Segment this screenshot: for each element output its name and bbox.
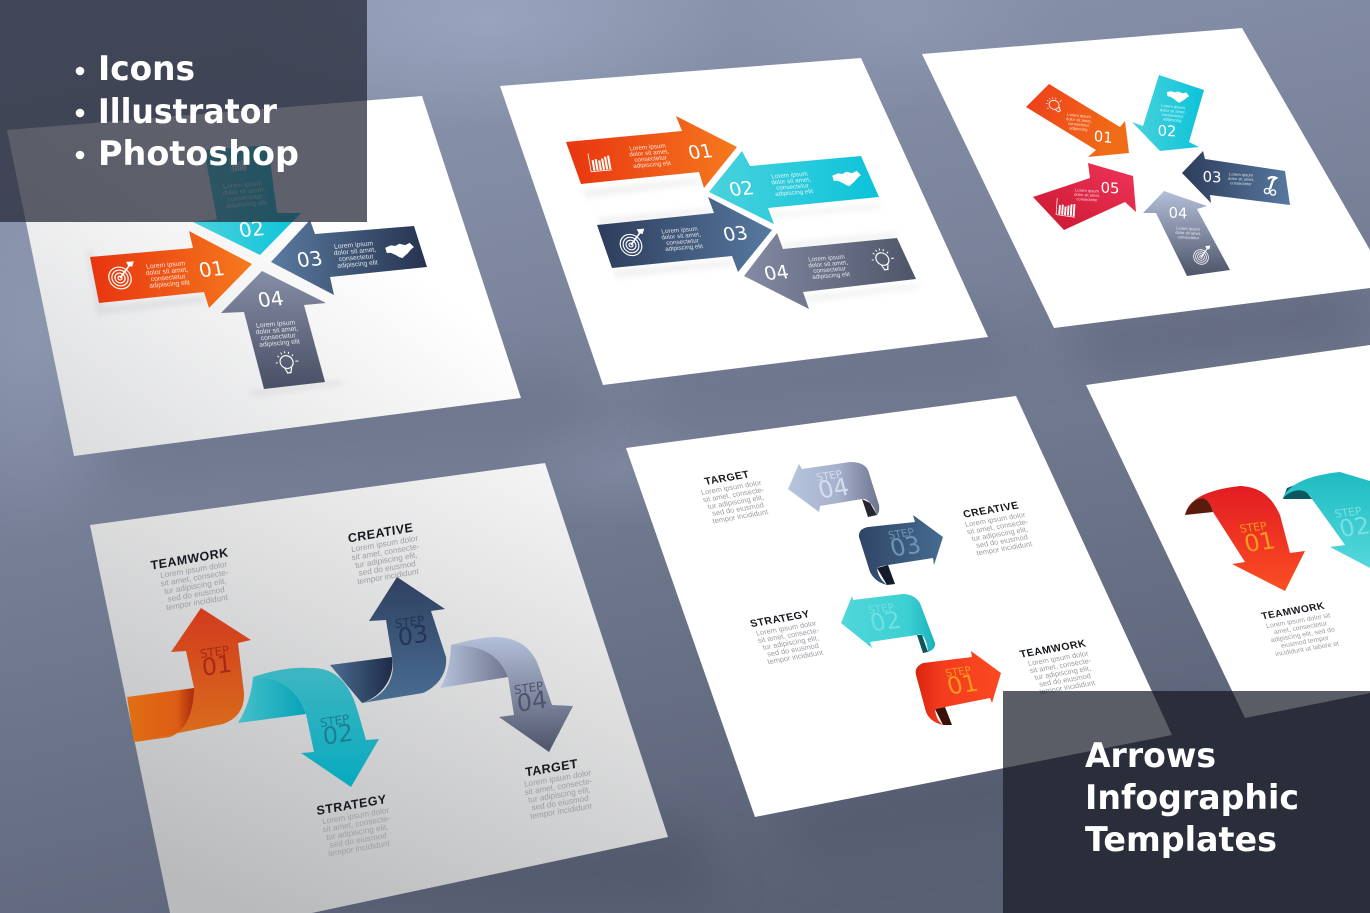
- icon: target: [617, 229, 649, 256]
- text: arrow 02 copy: adipiscing elit: [774, 188, 814, 198]
- text: teamwork: adipiscing elit, sed do: [1270, 626, 1336, 644]
- ribbon step 01: [916, 651, 1001, 725]
- text: arrow 04 copy: dolor sit amet,: [808, 259, 849, 269]
- bullet list: [76, 49, 299, 173]
- text: strategy: STRATEGY: [316, 792, 387, 818]
- text: creative: sed do eiusmod: [358, 559, 417, 578]
- text: creative: CREATIVE: [962, 501, 1021, 521]
- text: arrow 04 copy: adipiscing elit: [259, 338, 301, 349]
- text: arrow 02 copy: consectetur: [1162, 112, 1184, 119]
- text: arrow 02 copy: Lorem ipsum: [1161, 103, 1186, 110]
- text: arrow 01 copy: Lorem ipsum: [145, 260, 186, 271]
- panel: top-left feature list: [0, 0, 367, 222]
- text: arrow 03 copy: consectetur: [666, 237, 700, 247]
- label: step 04: STEP: [815, 469, 844, 484]
- text: teamwork: Lorem ipsum dolor: [1027, 649, 1090, 668]
- number 04: 04: [256, 286, 286, 312]
- text: arrow 02 copy: Lorem ipsum: [222, 180, 263, 191]
- text: target: Lorem ipsum dolor: [700, 478, 763, 497]
- text: teamwork: eiusmod tempor: [1280, 635, 1331, 650]
- text: target: TARGET: [703, 470, 751, 488]
- text: target: sit amet, consecte-: [702, 485, 766, 504]
- text: creative: tur adipiscing elit,: [355, 550, 418, 570]
- text: arrow 02 copy: dolor sit amet,: [222, 187, 266, 197]
- text: arrow 01 copy: adipiscing elit: [632, 160, 672, 170]
- text: teamwork: sed do eiusmod: [1038, 671, 1092, 689]
- panel: bottom-right title: [1003, 691, 1370, 913]
- arrow 01: [1026, 84, 1129, 157]
- text: target: sit amet, consecte-: [524, 776, 593, 797]
- text: strategy: tempor incididunt: [328, 839, 391, 858]
- text: arrow 03 copy: Lorem ipsum: [661, 226, 699, 235]
- text: arrow 04 copy: Lorem ipsum: [808, 254, 846, 263]
- number 01: 01: [197, 256, 227, 282]
- arrow 04: [744, 233, 916, 309]
- arrow step 04: [440, 637, 573, 752]
- ribbon step 02: [1283, 472, 1370, 568]
- text: arrow 03 copy: dolor sit amet,: [333, 247, 377, 257]
- text: creative: [960, 500, 1037, 558]
- icon: bulb: [274, 350, 301, 374]
- label: step 04: 04: [516, 685, 548, 718]
- text: strategy: tur adipiscing elit,: [761, 633, 820, 652]
- text: arrow 03 copy: dolor sit amet,: [661, 231, 702, 241]
- text: arrow 02 copy: consectetur: [776, 182, 810, 192]
- title: [1085, 736, 1299, 859]
- text: arrow 01 copy: dolor sit amet,: [145, 267, 189, 277]
- text: teamwork: sit amet, consecte-: [160, 568, 229, 588]
- arrow 04: [1143, 191, 1230, 276]
- arrow 01: [566, 116, 737, 188]
- arrow 01: [90, 231, 252, 308]
- arrow 03: [271, 220, 427, 295]
- bullet list: Icons: [98, 49, 195, 88]
- text: creative: tempor incididunt: [975, 539, 1033, 557]
- text: creative: sit amet, consecte-: [966, 517, 1030, 536]
- label: step 01: 01: [1241, 527, 1278, 558]
- text: arrow 02 copy: Lorem ipsum: [771, 171, 809, 180]
- panel: radial arrows card: [922, 28, 1370, 328]
- text: strategy: sed do eiusmod: [329, 831, 388, 850]
- ribbon step 01: [1185, 486, 1305, 591]
- title: Templates: [1085, 820, 1277, 859]
- label: step 01: 01: [201, 650, 233, 682]
- text: arrow 02 copy: dolor sit amet,: [1160, 107, 1186, 115]
- text: arrow 01 copy: consectetur: [150, 273, 187, 283]
- text: target: tempor incididunt: [711, 507, 769, 525]
- text: strategy: [316, 792, 394, 860]
- icon: target: [106, 262, 138, 290]
- text: creative: CREATIVE: [347, 520, 414, 546]
- number 04: 04: [1169, 205, 1187, 222]
- ribbon step 03: [859, 515, 943, 585]
- panel: bent arrows card: [90, 463, 668, 913]
- text: arrow 03 copy: adipiscing elit: [664, 243, 704, 253]
- text: creative: [347, 520, 423, 587]
- text: arrow 03 copy: Lorem ipsum: [1229, 171, 1254, 178]
- arrow 02: [1132, 75, 1204, 151]
- text: creative: tempor incididunt: [357, 567, 420, 586]
- text: teamwork: [1019, 639, 1100, 697]
- text: strategy: sit amet, consecte-: [322, 814, 391, 834]
- text: creative: sit amet, consecte-: [351, 542, 420, 562]
- text: target: [696, 468, 773, 526]
- text: teamwork: [150, 545, 233, 614]
- text: teamwork: amet, consectetur: [1273, 620, 1329, 636]
- text: strategy: sit amet, consecte-: [757, 626, 821, 645]
- text: target: sed do eiusmod: [711, 500, 765, 518]
- text: arrow 02 copy: adipiscing: [1163, 116, 1182, 123]
- arrow 02: [709, 151, 879, 224]
- icon: target: [1192, 246, 1213, 265]
- text: arrow 03 copy: Lorem ipsum: [333, 240, 374, 251]
- text: arrow 01 copy: consectetur: [1068, 121, 1090, 128]
- label: step 02: STEP: [319, 712, 350, 730]
- text: arrow 04 copy: Lorem ipsum: [1176, 225, 1200, 232]
- icon: wheel figure: [1264, 177, 1276, 195]
- text: strategy: [749, 609, 828, 667]
- text: arrow 03 copy: consectetur: [1230, 180, 1252, 186]
- text: strategy: tempor incididunt: [766, 648, 824, 666]
- text: arrow 04 copy: adipiscing elit: [811, 271, 851, 281]
- text: arrow 01 copy: dolor sit amet,: [1066, 116, 1092, 124]
- text: arrow 01 copy: adipiscing elit: [149, 279, 191, 290]
- label: step 01: STEP: [1238, 519, 1268, 536]
- text: arrow 04 copy: dolor sit amet,: [1175, 230, 1201, 236]
- arrow step 02: [238, 668, 379, 787]
- icon: handshake: [832, 171, 862, 187]
- text: arrow 01 copy: adipiscing: [1069, 125, 1088, 132]
- text: teamwork: tempor incididunt: [1038, 678, 1096, 696]
- text: teamwork: sed do eiusmod: [167, 585, 226, 604]
- icon: bulb: [869, 248, 897, 271]
- arrow 04: [221, 271, 326, 389]
- text: strategy: STRATEGY: [749, 609, 812, 630]
- text: strategy: Lorem ipsum dolor: [322, 806, 390, 826]
- title: Arrows: [1085, 736, 1216, 775]
- text: arrow 03 copy: adipiscing elit: [337, 259, 379, 270]
- text: strategy: Lorem ipsum dolor: [755, 619, 818, 638]
- number 03: 03: [1203, 169, 1221, 186]
- text: teamwork: sit amet, consecte-: [1029, 656, 1093, 675]
- bullet list: Photoshop: [98, 134, 299, 173]
- number 02: 02: [237, 216, 267, 242]
- icon: handshake: [1167, 90, 1189, 104]
- text: teamwork: incididunt ut labore et: [1274, 641, 1340, 658]
- text: arrow 03 copy: consectetur: [338, 253, 375, 263]
- number 03: 03: [721, 223, 750, 246]
- text: arrow 04 copy: Lorem ipsum: [255, 319, 296, 330]
- title: Infographic: [1085, 778, 1299, 817]
- panel: cross arrows card: [7, 96, 521, 456]
- text: teamwork: Lorem ipsum dolor: [160, 560, 228, 580]
- label: step 02: STEP: [1333, 504, 1363, 521]
- text: arrow 01 copy: dolor sit amet,: [629, 148, 670, 158]
- text: creative: Lorem ipsum dolor: [351, 534, 419, 554]
- text: arrow 04 copy: dolor sit amet,: [255, 326, 299, 336]
- text: arrow 02 copy: adipiscing elit: [226, 199, 268, 210]
- text: arrow 03 copy: dolor sit amet,: [1228, 176, 1254, 182]
- arrow step 01: [127, 608, 251, 742]
- icon: handshake: [385, 243, 415, 259]
- text: teamwork: tempor incididunt: [166, 593, 229, 612]
- label: step 01: 01: [944, 669, 981, 700]
- text: arrow 01 copy: Lorem ipsum: [1067, 112, 1092, 119]
- text: teamwork: [1260, 600, 1340, 658]
- text: teamwork: TEAMWORK: [150, 545, 229, 573]
- text: arrow 02 copy: dolor sit amet,: [771, 176, 812, 186]
- text: target: [522, 754, 596, 822]
- number 02: 02: [727, 178, 756, 201]
- label: step 02: 02: [867, 606, 904, 637]
- label: step 02: 02: [322, 718, 354, 751]
- text: teamwork: TEAMWORK: [1260, 601, 1327, 622]
- label: step 01: STEP: [944, 665, 973, 680]
- text: teamwork: Lorem ipsum dolor sit: [1265, 612, 1331, 630]
- bullet list: Illustrator: [98, 92, 277, 131]
- text: target: sed do eiusmod: [531, 794, 589, 812]
- panel: downward ribbon card: [1086, 345, 1370, 718]
- icon: chart: [229, 156, 247, 171]
- text: target: tur adipiscing elit,: [528, 785, 591, 805]
- arrow step 03: [330, 577, 446, 703]
- text: arrow 02 copy: consectetur: [227, 193, 264, 203]
- text: arrow 05 copy: dolor sit amet,: [1074, 192, 1100, 198]
- text: teamwork: tur adipiscing elit,: [164, 576, 227, 596]
- label: step 02: STEP: [867, 602, 896, 617]
- arrow 02: [193, 145, 301, 255]
- text: arrow 01 copy: consectetur: [634, 154, 668, 164]
- text: strategy: sed do eiusmod: [766, 641, 820, 659]
- icon: chart: [1056, 198, 1076, 217]
- number 03: 03: [295, 246, 325, 272]
- label: step 04: 04: [815, 473, 852, 504]
- label: step 03: STEP: [887, 527, 916, 542]
- text: teamwork: TEAMWORK: [1019, 639, 1088, 661]
- text: target: tempor incididunt: [530, 801, 593, 821]
- ribbon step 02: [841, 594, 935, 653]
- number 02: 02: [1158, 123, 1176, 140]
- text: target: tur adipiscing elit,: [706, 493, 765, 511]
- text: teamwork: tur adipiscing elit,: [1033, 664, 1092, 682]
- icon: bulb: [1042, 94, 1066, 115]
- arrow 03: [1182, 151, 1290, 205]
- text: arrow 04 copy: consectetur: [813, 265, 847, 275]
- label: step 04: STEP: [513, 679, 544, 697]
- text: creative: Lorem ipsum dolor: [964, 510, 1027, 529]
- arrow 03: [597, 197, 772, 272]
- panel: parallel arrows card: [500, 58, 988, 385]
- number 01: 01: [1093, 128, 1113, 147]
- text: arrow 01 copy: Lorem ipsum: [629, 143, 667, 152]
- arrow 05: [1033, 163, 1136, 230]
- label: step 01: STEP: [199, 643, 230, 661]
- text: arrow 05 copy: consectetur: [1076, 196, 1098, 202]
- panel: ribbon arrows card: [626, 396, 1172, 817]
- ribbon step 04: [788, 462, 879, 517]
- text: arrow 04 copy: consectetur: [260, 332, 297, 342]
- text: target: Lorem ipsum dolor: [524, 768, 592, 789]
- number 04: 04: [762, 262, 791, 285]
- text: creative: sed do eiusmod: [975, 532, 1029, 550]
- label: step 03: 03: [887, 531, 924, 562]
- number 05: 05: [1101, 180, 1119, 197]
- text: creative: tur adipiscing elit,: [970, 525, 1029, 543]
- text: arrow 04 copy: consectetur: [1178, 234, 1200, 240]
- text: target: TARGET: [525, 757, 579, 780]
- label: step 03: STEP: [394, 613, 425, 631]
- label: step 03: 03: [397, 619, 429, 652]
- text: strategy: tur adipiscing elit,: [326, 822, 389, 842]
- text: arrow 05 copy: Lorem ipsum: [1075, 187, 1099, 194]
- icon: chart: [588, 151, 612, 172]
- number 01: 01: [686, 141, 715, 164]
